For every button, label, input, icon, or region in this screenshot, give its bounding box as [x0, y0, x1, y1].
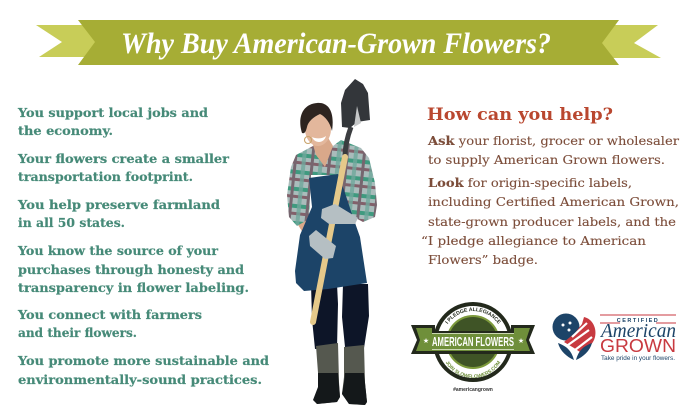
benefits list: You know the source of your — [17, 243, 218, 258]
benefits list: You support local jobs and — [17, 105, 208, 120]
help text: “I pledge allegiance to American — [421, 233, 646, 248]
title banner — [36, 20, 661, 65]
benefits list: You promote more sustainable and — [17, 353, 269, 368]
benefits list: purchases through honesty and — [18, 262, 244, 277]
badge: Certified American Grown: American — [599, 320, 676, 342]
badge: I pledge allegiance: #americangrown — [453, 387, 493, 393]
title: Why Buy American-Grown Flowers? — [121, 27, 551, 60]
help text: to supply American Grown flowers. — [428, 152, 665, 167]
badge: I pledge allegiance — [411, 302, 535, 393]
badge: I pledge allegiance: JOIN SLOWFLOWERS.COM — [446, 360, 500, 378]
boots — [313, 343, 367, 405]
help text: Look for origin-specific labels, — [428, 175, 632, 190]
badge: Certified American Grown: Take pride in your flowers. — [601, 355, 675, 362]
benefits list: and their flowers. — [18, 325, 137, 340]
head — [300, 103, 333, 167]
badge: Certified American Grown: GROWN — [600, 336, 676, 356]
badge: I pledge allegiance: I PLEDGE ALLEGIANCE — [445, 308, 501, 324]
person with shovel — [287, 79, 377, 405]
help text: including Certified American Grown, — [428, 194, 679, 209]
badge: I pledge allegiance: ★ — [518, 337, 524, 345]
help text: Ask your florist, grocer or wholesaler — [427, 133, 679, 148]
apron — [295, 174, 367, 291]
benefits list: in all 50 states. — [18, 215, 125, 230]
shirt — [287, 140, 377, 226]
benefits list — [17, 105, 269, 387]
benefits list: You connect with farmers — [17, 307, 202, 322]
benefits list: Your flowers create a smaller — [17, 151, 229, 166]
benefits list: environmentally-sound practices. — [18, 372, 262, 387]
badge: I pledge allegiance: ★ — [423, 337, 429, 345]
help text — [421, 133, 679, 267]
benefits list: transparency in flower labeling. — [18, 280, 249, 295]
badge: I pledge allegiance: AMERICAN FLOWERS — [432, 334, 514, 349]
help text: state-grown producer labels, and the — [428, 214, 676, 229]
help heading: How can you help? — [427, 105, 613, 125]
forearms — [295, 201, 370, 246]
gloves — [309, 204, 358, 259]
badge: Certified American Grown — [552, 314, 676, 362]
badge: Certified American Grown: CERTIFIED — [617, 318, 659, 324]
icon: flower shield — [552, 314, 596, 360]
benefits list: the economy. — [18, 123, 113, 138]
shovel — [313, 79, 370, 322]
benefits list: You help preserve farmland — [17, 197, 220, 212]
benefits list: transportation footprint. — [18, 169, 193, 184]
help text: Flowers” badge. — [428, 252, 538, 267]
legs — [311, 284, 369, 349]
